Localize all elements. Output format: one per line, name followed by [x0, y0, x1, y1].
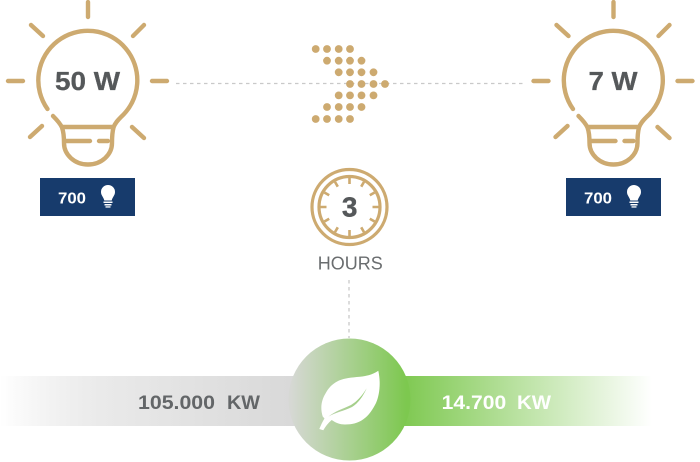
bar: before consumption — [0, 376, 300, 426]
count badge left — [40, 178, 135, 216]
label: hours: HOURS — [318, 253, 383, 273]
bar: after consumption: 14.700 — [442, 392, 506, 414]
bulb: 7 W: 7 W — [588, 66, 638, 96]
bulb: 50 W: 50 W — [55, 66, 120, 96]
dashed connector — [176, 82, 526, 84]
icon: small bulb — [101, 185, 115, 208]
icon: clock: 3 — [342, 192, 357, 223]
icon: leaf — [319, 371, 380, 430]
count badge right — [566, 178, 661, 216]
bulb: 7 W — [534, 2, 692, 164]
bar: before consumption: KW — [227, 392, 261, 414]
bar: before consumption: 105.000 — [138, 392, 215, 414]
icon: clock — [312, 170, 387, 244]
bar: after consumption — [400, 376, 652, 426]
count badge left: 700 — [58, 190, 86, 208]
arrow: dotted chevron — [312, 45, 389, 123]
icon: small bulb right — [627, 185, 641, 208]
vertical dashed connector — [348, 280, 350, 338]
bulb: 50 W — [8, 2, 167, 164]
count badge right: 700 — [584, 190, 612, 208]
leaf badge — [288, 338, 410, 460]
bar: after consumption: KW — [517, 392, 552, 414]
